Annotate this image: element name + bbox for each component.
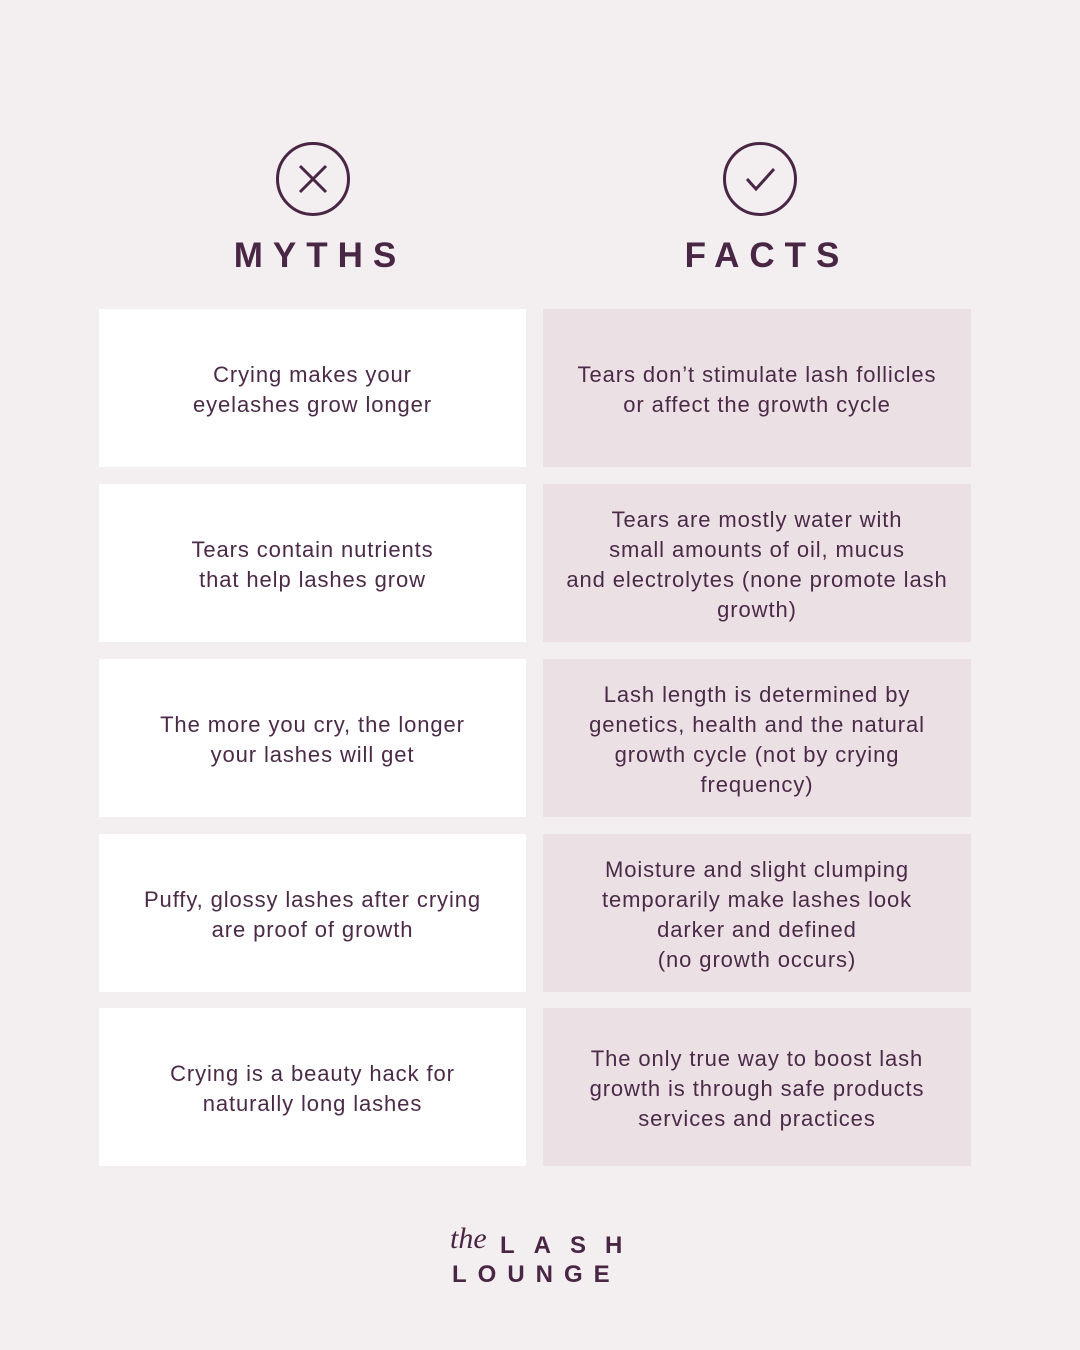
fact 1 [543,309,971,467]
fact 3: Lash length is determined by [604,682,910,707]
fact 1: or affect the growth cycle [623,392,891,417]
myth 5: Crying is a beauty hack for [170,1061,455,1086]
fact 4: darker and defined [657,917,857,942]
myth 1: eyelashes grow longer [193,392,432,417]
fact 2: and electrolytes (none promote lash [566,567,948,592]
fact 5: services and practices [638,1106,876,1131]
logo [450,1222,641,1288]
myth 3: your lashes will get [211,742,414,767]
heading: myths: MYTHS [234,236,406,275]
fact 3: frequency) [701,772,813,797]
fact 5 [543,1008,971,1166]
fact 3 [543,659,971,817]
logo: the [450,1222,487,1255]
fact 2: small amounts of oil, mucus [609,537,905,562]
logo: LASH [500,1232,641,1259]
fact 4 [543,834,971,992]
fact 3: growth cycle (not by crying [615,742,899,767]
myth 4: Puffy, glossy lashes after crying [144,887,481,912]
fact 4: Moisture and slight clumping [605,857,909,882]
fact 3: genetics, health and the natural [589,712,925,737]
myth 5: naturally long lashes [203,1091,422,1116]
fact 1: Tears don’t stimulate lash follicles [578,362,936,387]
myth 4 [99,834,526,992]
fact 4: temporarily make lashes look [602,887,912,912]
fact 5: growth is through safe products [590,1076,924,1101]
heading: facts: FACTS [685,236,849,275]
myth 2: that help lashes grow [199,567,426,592]
myth 3 [99,659,526,817]
icon: myths x [276,142,350,216]
fact 2: Tears are mostly water with [612,507,902,532]
myth 4: are proof of growth [212,917,413,942]
logo: LOUNGE [452,1261,621,1288]
fact 5: The only true way to boost lash [591,1046,923,1071]
myth 2: Tears contain nutrients [191,537,434,562]
fact 4: (no growth occurs) [658,947,856,972]
myth 5 [99,1008,526,1166]
myth 1: Crying makes your [213,362,412,387]
fact 2: growth) [717,597,797,622]
fact 2 [543,484,971,642]
myth 2 [99,484,526,642]
icon: facts check [723,142,797,216]
myth 1 [99,309,526,467]
myth 3: The more you cry, the longer [160,712,465,737]
